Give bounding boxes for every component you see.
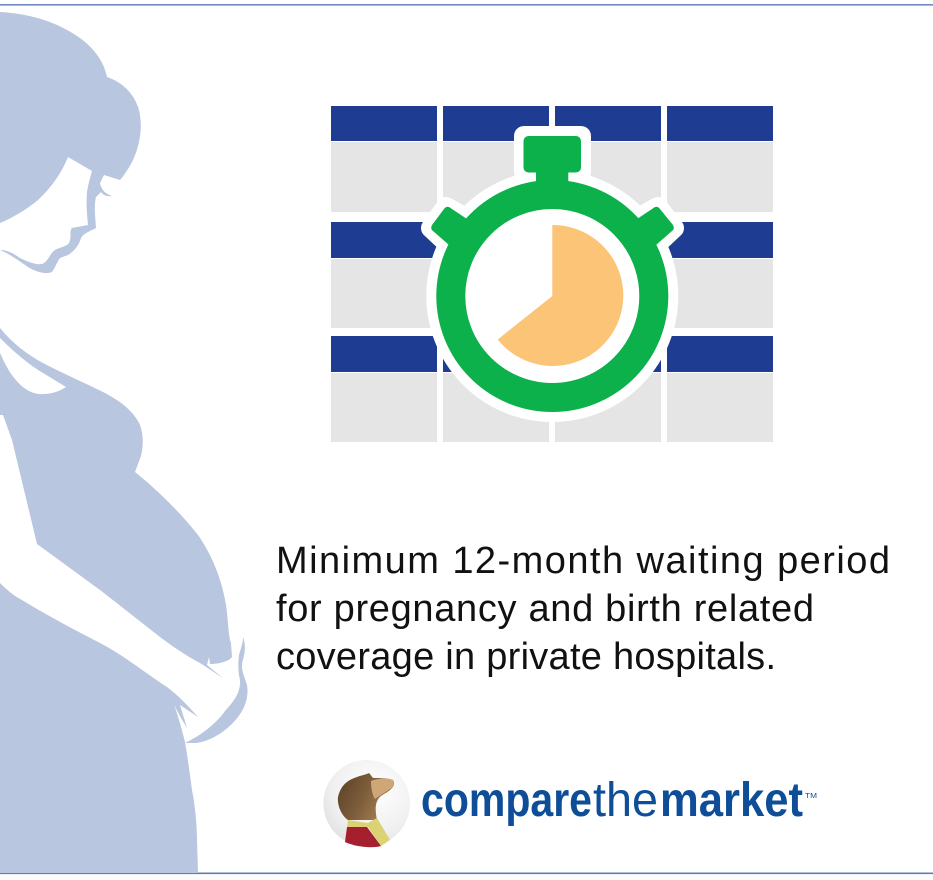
- logo wordmark: [421, 774, 817, 827]
- silhouette: hair and face: [0, 12, 141, 273]
- text line 3: coverage in private hospitals.: [276, 636, 776, 678]
- pregnant woman silhouette: [0, 12, 248, 873]
- calendar header row 2: [331, 222, 773, 258]
- stopwatch ring: [451, 194, 654, 398]
- calendar header row 3: [331, 336, 773, 372]
- calendar header row 1: [331, 106, 773, 141]
- icon: meerkat badge: [323, 760, 410, 847]
- icon: stopwatch: [431, 136, 674, 412]
- text line 2: for pregnancy and birth related: [276, 588, 814, 630]
- calendar grid: [331, 106, 773, 442]
- logo wordmark: the: [593, 774, 658, 827]
- silhouette: hand: [185, 637, 248, 743]
- silhouette: torso and belly: [0, 328, 232, 678]
- text line 1: Minimum 12-month waiting period: [276, 540, 890, 582]
- silhouette: arm gap lower body: [0, 583, 198, 873]
- calendar cells row 3: [331, 373, 773, 442]
- stopwatch white halo: [431, 136, 674, 412]
- calendar cells row 2: [331, 259, 773, 328]
- calendar cells row 1: [331, 142, 773, 212]
- logo wordmark: TM: [805, 791, 817, 800]
- waiting period statement: [276, 540, 890, 678]
- stopwatch elapsed wedge: [498, 225, 623, 366]
- logo wordmark: market: [660, 774, 803, 827]
- stopwatch body: [431, 136, 674, 245]
- logo: compare the market: [323, 760, 817, 847]
- logo wordmark: compare: [421, 774, 592, 827]
